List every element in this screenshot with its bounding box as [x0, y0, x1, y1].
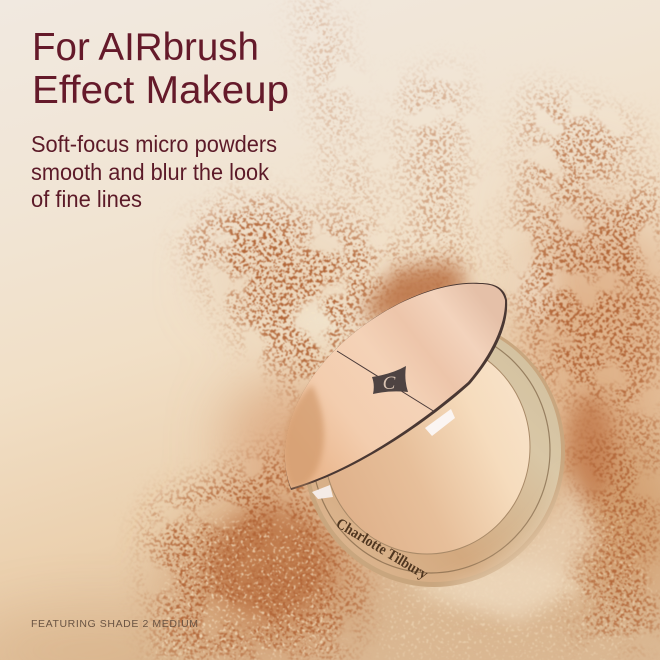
lid powder dusting	[283, 385, 324, 488]
powder burst: soft clouds	[0, 160, 660, 660]
powder pan	[324, 340, 530, 554]
body text: Soft-focus micro powders	[31, 131, 277, 157]
title: Effect Makeup	[32, 69, 289, 112]
title: For AIRbrush	[32, 26, 259, 69]
powder dust over base	[440, 470, 600, 625]
compact base	[303, 317, 565, 587]
lid	[283, 283, 507, 490]
lid seam lines	[337, 351, 435, 412]
rear hinge highlight	[312, 485, 333, 499]
lid diamond logo: C	[383, 373, 396, 394]
title	[32, 26, 289, 112]
brand engraving: Charlotte Tilbury	[333, 516, 431, 583]
body text: smooth and blur the look	[31, 159, 269, 185]
powder speckles: light	[150, 260, 657, 660]
body text: of fine lines	[31, 186, 142, 212]
hinge clip	[425, 409, 455, 436]
body text	[31, 131, 277, 212]
shade caption: FEATURING SHADE 2 MEDIUM	[31, 618, 198, 630]
lid diamond logo	[372, 366, 408, 394]
compact	[283, 283, 600, 625]
